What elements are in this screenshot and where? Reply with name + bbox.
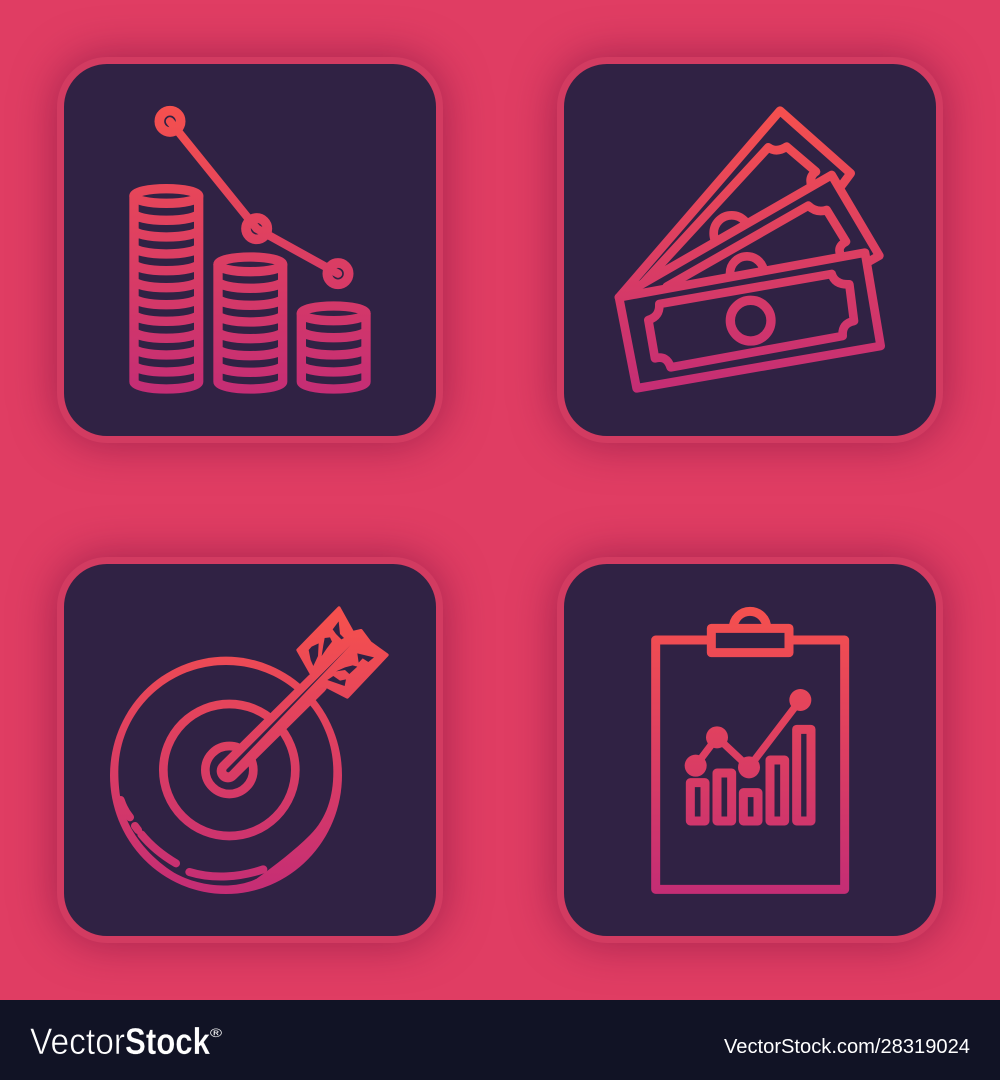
icon: target with arrow xyxy=(110,606,389,894)
footer bar xyxy=(0,1000,1000,1080)
icon: clipboard with chart xyxy=(651,606,850,894)
panel: banknotes xyxy=(557,57,943,443)
panel: falling coin stacks xyxy=(57,57,443,443)
short coin stack xyxy=(301,306,366,389)
panel: clipboard report xyxy=(557,557,943,943)
tall coin stack xyxy=(134,189,199,389)
declining trend line xyxy=(159,111,349,284)
arrow shaft xyxy=(228,683,317,771)
line chart xyxy=(685,689,811,778)
panel: target xyxy=(57,557,443,943)
medium coin stack xyxy=(218,257,283,389)
icon: coin stacks with declining line xyxy=(129,106,371,394)
logo: VectorStock: ® xyxy=(210,1026,222,1040)
logo: VectorStock: Stock xyxy=(125,1021,210,1062)
icon: fan of three banknotes xyxy=(614,106,885,393)
logo: VectorStock: Vector xyxy=(30,1021,125,1062)
arrow fletching xyxy=(298,608,387,697)
inner target ring xyxy=(205,746,253,794)
back banknote xyxy=(619,111,851,297)
middle banknote xyxy=(619,175,879,297)
logo: VectorStock xyxy=(30,1021,222,1062)
middle target ring xyxy=(163,704,295,836)
front banknote xyxy=(619,253,881,388)
clipboard clip xyxy=(711,611,789,653)
arrow centre line xyxy=(226,645,351,772)
clipboard board xyxy=(656,640,845,889)
bar chart xyxy=(690,729,811,821)
outer target ring xyxy=(110,657,342,894)
image id: VectorStock.com/28319024 xyxy=(724,1036,970,1058)
